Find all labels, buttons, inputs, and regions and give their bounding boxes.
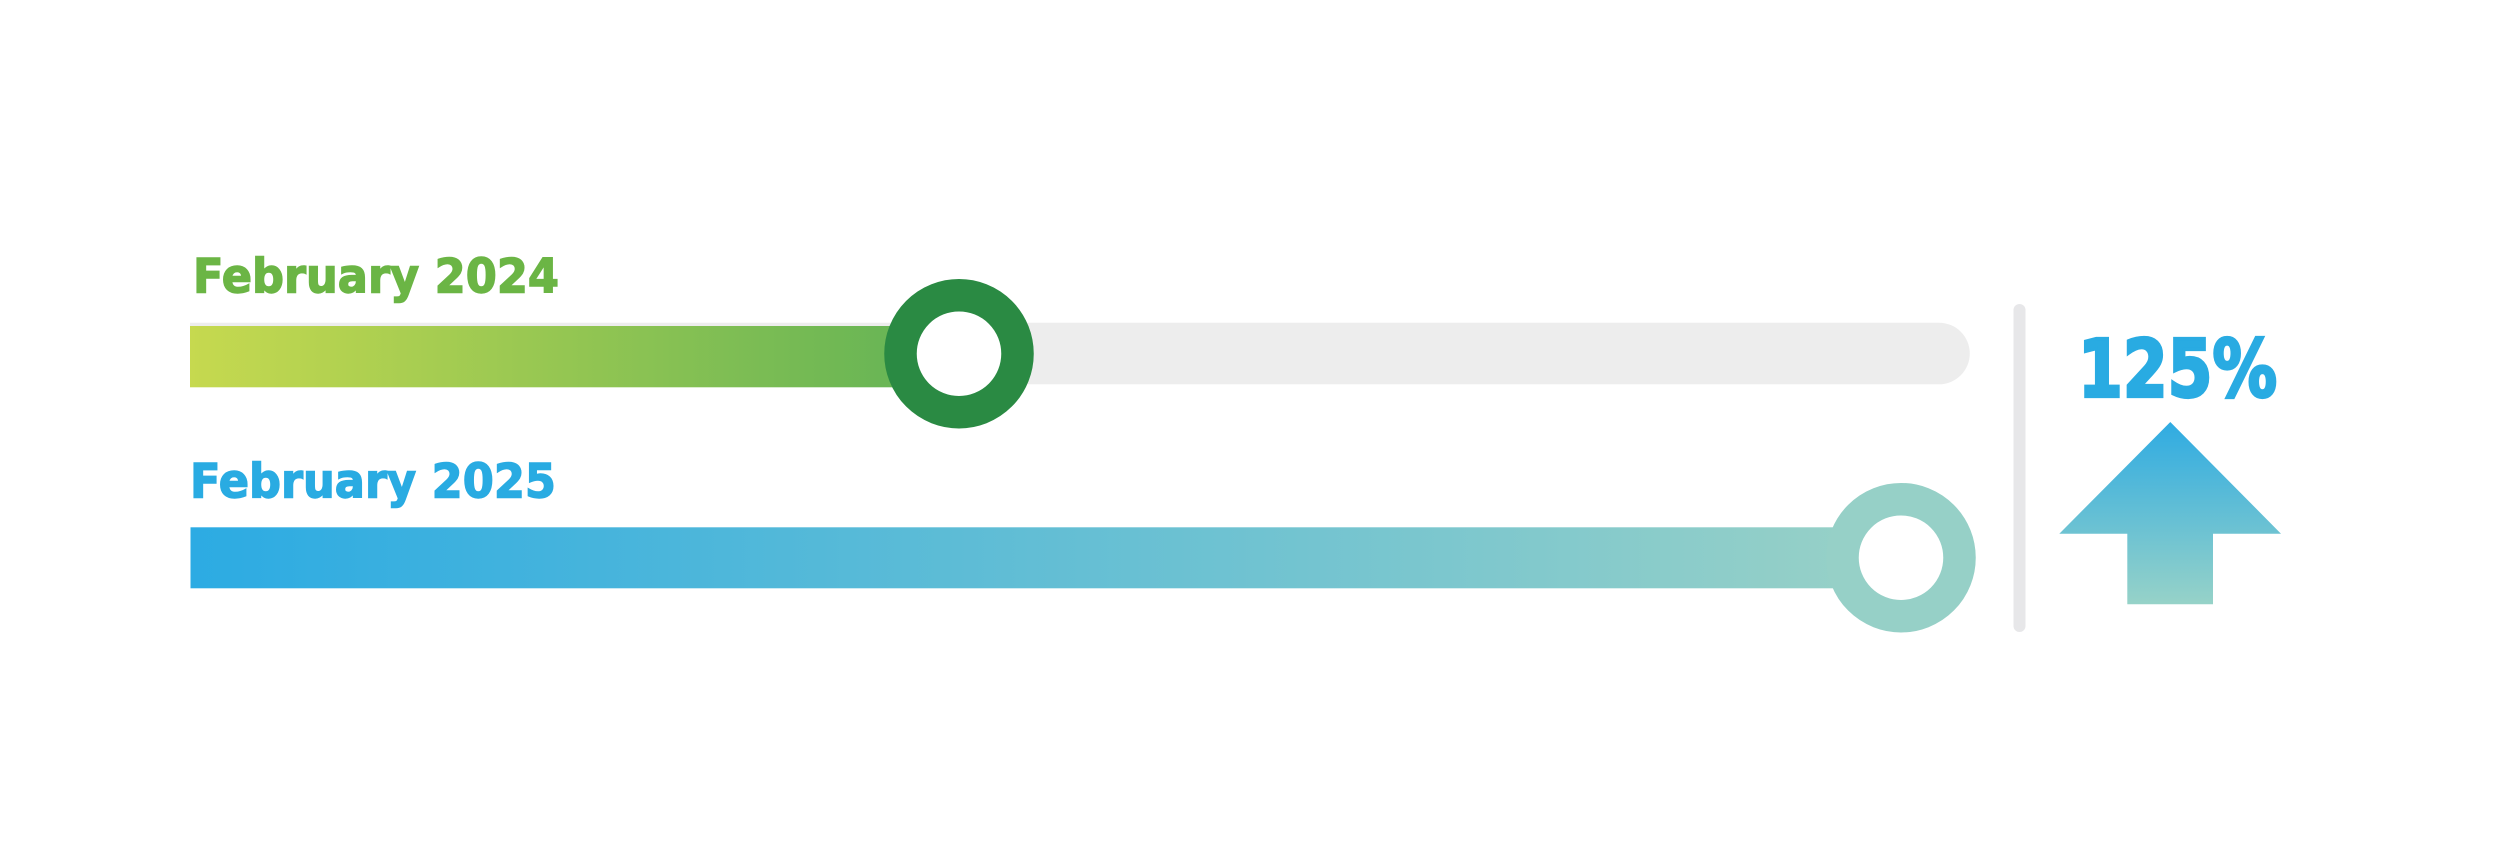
icon: up arrow xyxy=(2059,422,2281,604)
label: February 2025: February 2025 xyxy=(190,454,556,510)
label: February 2024: February 2024 xyxy=(193,250,559,304)
progress fill xyxy=(190,326,900,387)
divider xyxy=(2014,304,2026,632)
progress track xyxy=(190,323,1970,384)
value: 125%: 125% xyxy=(2078,324,2277,416)
row: February 2024 xyxy=(190,250,1970,412)
progress fill xyxy=(190,527,1870,588)
slider knob: teal ring xyxy=(1842,499,1960,616)
slider knob: dark green ring xyxy=(900,295,1018,412)
row: February 2025 xyxy=(190,454,1960,616)
